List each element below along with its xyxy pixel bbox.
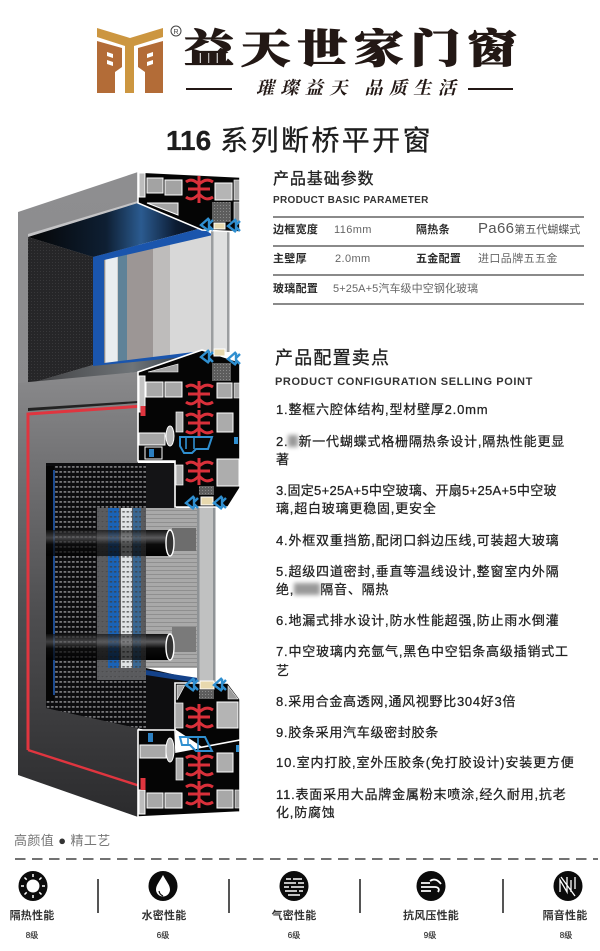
view through the screen [120,463,198,736]
performance: heat insulation: 隔热性能 [10,910,54,922]
performance: heat insulation: 8级 [26,931,38,940]
dashed divider [15,858,598,860]
icon: wind [416,871,446,901]
performance: sound insulation: 8级 [560,931,572,940]
performance: air tightness [272,871,316,940]
slogan rule right [468,88,513,90]
brand name: 益天世家门窗 [184,27,524,71]
horizontal bars [46,528,196,660]
profile: top section [138,172,240,232]
panel: upper frame face [18,172,138,400]
parameter table: 隔热条 [416,224,450,236]
logo mark [97,26,182,93]
performance: wind pressure [403,871,459,940]
title: 116 系列断桥平开窗 [166,125,433,156]
slogan rule left [186,88,232,90]
icon: water drop [148,871,178,901]
window cross-section illustration [18,172,241,817]
selling points list [276,402,575,820]
upper opening interior [28,203,202,384]
subheading: basic parameter: PRODUCT BASIC PARAMETER [273,195,429,206]
parameter table [273,216,584,305]
selling points list: 9.胶条采用汽车级密封胶条 [276,725,439,740]
parameter table: 116mm [334,224,372,236]
profile: sash bottom section [175,678,240,755]
selling points list: 5.超级四道密封,垂直等温线设计,整窗室内外隔 [276,564,559,579]
icon: sound wave [554,871,582,901]
selling points list: 11.表面采用大品牌金属粉末喷涂,经久耐用,抗老 [276,787,567,802]
caption: 高颜值 ● 精工艺 [14,833,111,848]
performance: sound insulation [543,871,587,940]
upper glass view [105,234,212,363]
subheading: selling points: PRODUCT CONFIGURATION SELLING POINT [275,376,533,388]
selling points list: 绝, 隔音、隔热 [276,582,389,597]
selling points list: 3.固定5+25A+5中空玻璃、开扇5+25A+5中空玻 [276,483,557,498]
performance: wind pressure: 9级 [424,931,436,940]
selling points list: 7.中空玻璃内充氩气,黑色中空铝条高级插销式工 [276,644,569,659]
heading: selling points: 产品配置卖点 [275,348,390,368]
parameter table: 主壁厚 [273,253,307,265]
red seal hooks [140,406,146,790]
performance: water tightness: 6级 [157,931,169,940]
parameter table: 2.0mm [335,253,371,265]
performance: sound insulation: 隔音性能 [543,910,587,922]
parameter table: Pa66第五代蝴蝶式 [478,220,580,237]
performance: wind pressure: 抗风压性能 [403,910,459,922]
red sealing line [28,406,144,786]
parameter table: 边框宽度 [273,224,318,236]
performance: water tightness: 水密性能 [142,910,186,922]
mesh screen [46,463,146,730]
performance: air tightness: 6级 [288,931,300,940]
selling points list: 化,防腐蚀 [276,805,336,820]
text: R [173,29,179,36]
selling points list: 6.地漏式排水设计,防水性能超强,防止雨水倒灌 [276,613,559,628]
selling points list: 10.室内打胶,室外压胶条(免打胶设计)安装更方便 [276,755,575,770]
parameter table: 玻璃配置 [273,283,318,295]
selling points list: 2. 新一代蝴蝶式格栅隔热条设计,隔热性能更显 [276,434,565,449]
parameter table: 5+25A+5汽车级中空钢化玻璃 [333,283,478,295]
icon: air layers [280,871,308,901]
parameter table: 进口品牌五五金 [478,253,558,265]
selling points list: 著 [276,452,290,467]
selling points list: 1.整框六腔体结构,型材壁厚2.0mm [276,402,488,417]
heading: basic parameter: 产品基础参数 [273,171,374,188]
profile: middle section [138,349,240,509]
glass panes lower [197,505,216,685]
glass panes upper [211,230,230,352]
performance: heat insulation [10,871,54,940]
profile: frame bottom section [138,730,240,817]
selling points list: 8.采用合金高透网,通风视野比304好3倍 [276,694,516,709]
performance: air tightness: 气密性能 [272,910,316,922]
performance: water tightness [142,871,186,940]
selling points list: 4.外框双重挡筋,配闭口斜边压线,可装超大玻璃 [276,533,559,548]
parameter table: 五金配置 [416,253,461,265]
panel: lower sash face [18,372,146,817]
icon: sun [18,871,48,901]
selling points list: 璃,超白玻璃更稳固,更安全 [276,501,437,516]
selling points list: 艺 [276,663,290,678]
blue frame strip [93,228,213,366]
slogan: 璀璨益天 品质生活 [256,78,462,98]
